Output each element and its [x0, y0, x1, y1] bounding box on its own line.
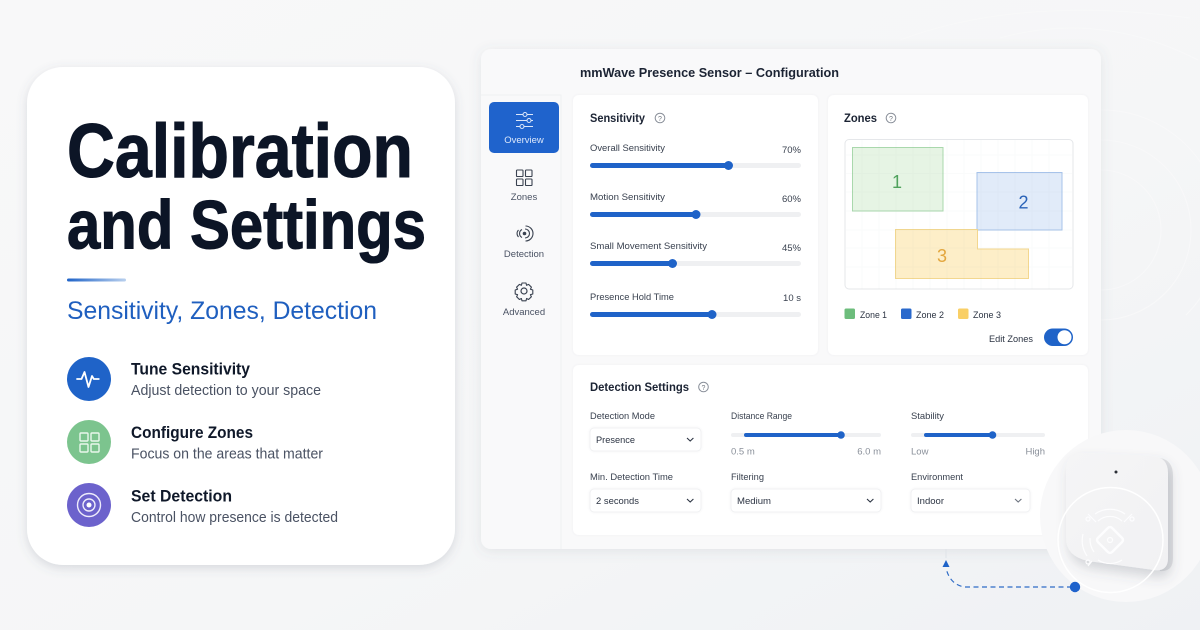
select: Environment: Environment [911, 472, 963, 483]
slider: Stability: High [1025, 446, 1045, 458]
panel: configuration window [481, 49, 1101, 549]
slider: Overall Sensitivity: Overall Sensitivity [590, 143, 665, 154]
legend: Zone 3 [973, 310, 1001, 321]
slider: Motion Sensitivity [590, 192, 802, 219]
heading: Detection Settings: Detection Settings [590, 382, 689, 394]
slider: Motion Sensitivity: 60% [782, 194, 802, 205]
zone 3: 3 [937, 246, 947, 266]
slider: Overall Sensitivity [590, 143, 802, 170]
slider: Stability: Low [911, 446, 929, 458]
nav item: Detection: Detection [504, 249, 544, 260]
slider: Motion Sensitivity: Motion Sensitivity [590, 192, 665, 203]
slider: Distance Range: 0.5 m [731, 446, 755, 458]
feature: Tune Sensitivity: Adjust detection to your space [131, 383, 321, 399]
zone 3 [896, 230, 1028, 278]
zone 2: 2 [1018, 192, 1029, 212]
heading: Sensitivity: Sensitivity [590, 113, 646, 125]
help icon: ? [889, 116, 893, 123]
select: Detection Mode: Detection Mode [590, 411, 655, 422]
nav item: Zones [511, 170, 537, 203]
slider: Small Movement Sensitivity: 45% [782, 243, 802, 254]
select: Min. Detection Time [590, 472, 701, 512]
nav item: Overview [489, 102, 559, 153]
connector arrow [942, 549, 1072, 587]
help icon: ? [658, 116, 662, 123]
device side edge [1160, 458, 1173, 571]
heading: Calibration and Settings [67, 109, 426, 264]
slider: Stability: Stability [911, 411, 944, 422]
toggle: Edit Zones [989, 328, 1073, 346]
window title: mmWave Presence Sensor – Configuration [580, 65, 839, 80]
feature: Configure Zones [67, 420, 323, 464]
slider: Distance Range: Distance Range [731, 411, 792, 422]
heading: Calibration and Settings: and Settings [67, 186, 426, 264]
slider: Presence Hold Time: 10 s [783, 293, 801, 304]
nav item: Advanced: Advanced [503, 307, 545, 318]
feature: Set Detection [67, 483, 338, 527]
toggle: Edit Zones: Edit Zones [989, 334, 1033, 345]
slider: Presence Hold Time [590, 292, 801, 319]
zone map [845, 140, 1073, 289]
feature: Set Detection: Control how presence is detected [131, 510, 338, 526]
feature: Configure Zones: Focus on the areas that matter [131, 446, 323, 462]
feature: Tune Sensitivity: Tune Sensitivity [131, 360, 250, 378]
legend: Zone 1 [860, 310, 887, 321]
heading: Zones: Zones [844, 113, 877, 125]
slider: Distance Range [731, 411, 881, 458]
nav item: Detection [504, 226, 544, 260]
help icon: ? [702, 385, 706, 392]
zone 1: 1 [892, 172, 902, 192]
select: Min. Detection Time: 2 seconds [596, 496, 639, 507]
panel: detection settings [573, 365, 1088, 535]
select: Filtering: Medium [737, 496, 771, 507]
nav item: Advanced [503, 283, 545, 318]
device body [1066, 453, 1168, 570]
nav item: Zones: Zones [511, 192, 537, 203]
nav item: Overview: Overview [504, 135, 544, 146]
slider: Distance Range: 6.0 m [857, 446, 881, 458]
zone 2 [977, 172, 1062, 230]
zone 1 [852, 148, 943, 211]
slider: Small Movement Sensitivity: Small Movement Sensitivity [590, 241, 707, 252]
feature: Tune Sensitivity [67, 357, 321, 401]
accent rule [67, 278, 126, 282]
select: Detection Mode [590, 411, 701, 451]
legend: Zone 2 [916, 310, 944, 321]
subtitle: Sensitivity, Zones, Detection [67, 297, 377, 325]
detection ring [1058, 488, 1163, 592]
status LED [1114, 470, 1118, 474]
legend [844, 308, 1001, 321]
select: Filtering: Filtering [731, 472, 764, 483]
panel: zones [828, 95, 1088, 355]
help icon [886, 113, 896, 123]
select: Environment: Indoor [917, 496, 944, 507]
slider: Presence Hold Time: Presence Hold Time [590, 292, 674, 303]
feature: Configure Zones: Configure Zones [131, 423, 253, 442]
connector origin dot [1070, 582, 1080, 592]
select: Environment [911, 472, 1030, 512]
help icon [655, 113, 665, 123]
panel: sensitivity [573, 95, 818, 355]
heading: Calibration and Settings: Calibration [67, 109, 413, 194]
select: Filtering [731, 472, 881, 512]
feature: Set Detection: Set Detection [131, 486, 232, 506]
sensor device [1040, 430, 1200, 602]
help icon [699, 382, 708, 392]
slider: Stability [911, 411, 1045, 458]
select: Detection Mode: Presence [596, 435, 635, 446]
select: Min. Detection Time: Min. Detection Time [590, 472, 673, 483]
panel: title card [27, 67, 455, 565]
sidebar [481, 95, 561, 549]
slider: Small Movement Sensitivity [590, 241, 802, 268]
halo [1040, 430, 1200, 602]
slider: Overall Sensitivity: 70% [782, 145, 802, 156]
wave emblem [1082, 509, 1134, 566]
